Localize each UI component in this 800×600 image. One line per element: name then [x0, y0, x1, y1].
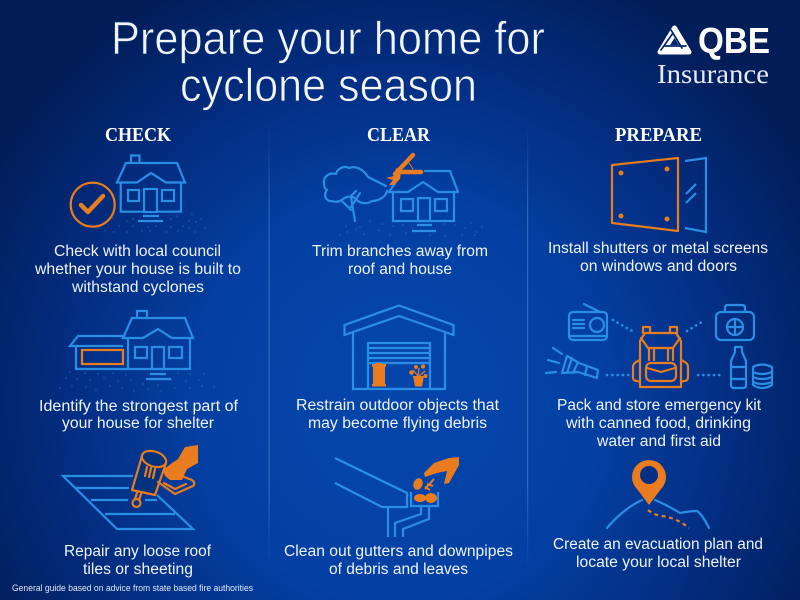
text: restrain outdoor objects: Restrain outdoor objects that	[296, 397, 500, 414]
icon: flashlight	[546, 348, 598, 378]
text: pack emergency kit: Pack and store emergency kit	[557, 397, 762, 414]
text: install shutters: Install shutters or metal screens	[548, 240, 768, 257]
logo: QBE Insurance	[657, 20, 770, 89]
icon: cleaning gutter	[335, 457, 459, 537]
panel: prepare	[546, 124, 772, 571]
text: restrain outdoor objects: may become flying debris	[308, 415, 487, 432]
text: clean out gutters: Clean out gutters and downpipes	[284, 543, 513, 560]
text: check with local council	[34, 243, 241, 296]
heading: prepare: PREPARE	[615, 124, 702, 146]
icon: window shutter	[612, 158, 706, 232]
logo: QBE Insurance: Insurance	[657, 59, 769, 89]
title: Prepare your home for	[111, 12, 545, 64]
text: pack emergency kit: water and first aid	[596, 433, 721, 450]
icon: backpack	[633, 327, 688, 387]
text: clean out gutters	[284, 543, 513, 578]
text: pack emergency kit	[557, 397, 762, 450]
text: repair loose roof: Repair any loose roof	[64, 543, 212, 560]
text: clean out gutters: of debris and leaves	[329, 561, 468, 578]
panel: check	[34, 124, 241, 578]
text: create evacuation plan: Create an evacuation plan and	[553, 536, 763, 553]
icon: house with check mark	[71, 156, 205, 232]
text: install shutters	[548, 240, 768, 275]
text: identify strongest part: your house for shelter	[62, 415, 214, 432]
text: check with local council: withstand cyclones	[71, 279, 204, 296]
footnote: General guide based on advice from state based fire authorities	[12, 583, 253, 593]
icon: repairing roof with sealant gun	[63, 445, 198, 529]
icon: trimming tree near house	[324, 155, 482, 236]
text: check with local council: whether your house is built to	[34, 261, 241, 278]
text: install shutters: on windows and doors	[580, 258, 737, 275]
kit connector dots	[607, 320, 721, 375]
text: trim branches	[312, 243, 488, 278]
icon: garage with bin and plant	[344, 306, 454, 389]
logo: QBE Insurance: QBE	[698, 20, 770, 61]
icon: emergency kit	[546, 304, 772, 388]
text: pack emergency kit: with canned food, drinking	[565, 415, 751, 432]
icon: bottle and cans	[731, 347, 772, 388]
icon: QBE knot	[660, 28, 689, 52]
panel: clear	[284, 124, 513, 578]
heading: check: CHECK	[105, 124, 171, 146]
title: cyclone season	[180, 59, 477, 111]
icon: radio	[569, 304, 607, 340]
icon: map pin over hills	[607, 460, 709, 528]
text: create evacuation plan: locate your local shelter	[576, 554, 741, 571]
text: restrain outdoor objects	[296, 397, 500, 432]
text: identify strongest part	[39, 398, 239, 432]
text: trim branches: roof and house	[348, 261, 452, 278]
text: create evacuation plan	[553, 536, 763, 571]
icon: house with garage	[60, 311, 214, 391]
text: check with local council: Check with local council	[54, 243, 221, 260]
text: repair loose roof	[64, 543, 212, 578]
text: repair loose roof: tiles or sheeting	[83, 561, 193, 578]
title	[111, 12, 545, 111]
text: trim branches: Trim branches away from	[312, 243, 488, 260]
text: identify strongest part: Identify the strongest part of	[39, 398, 239, 415]
heading: clear: CLEAR	[367, 124, 430, 146]
icon: first aid box	[716, 305, 754, 340]
